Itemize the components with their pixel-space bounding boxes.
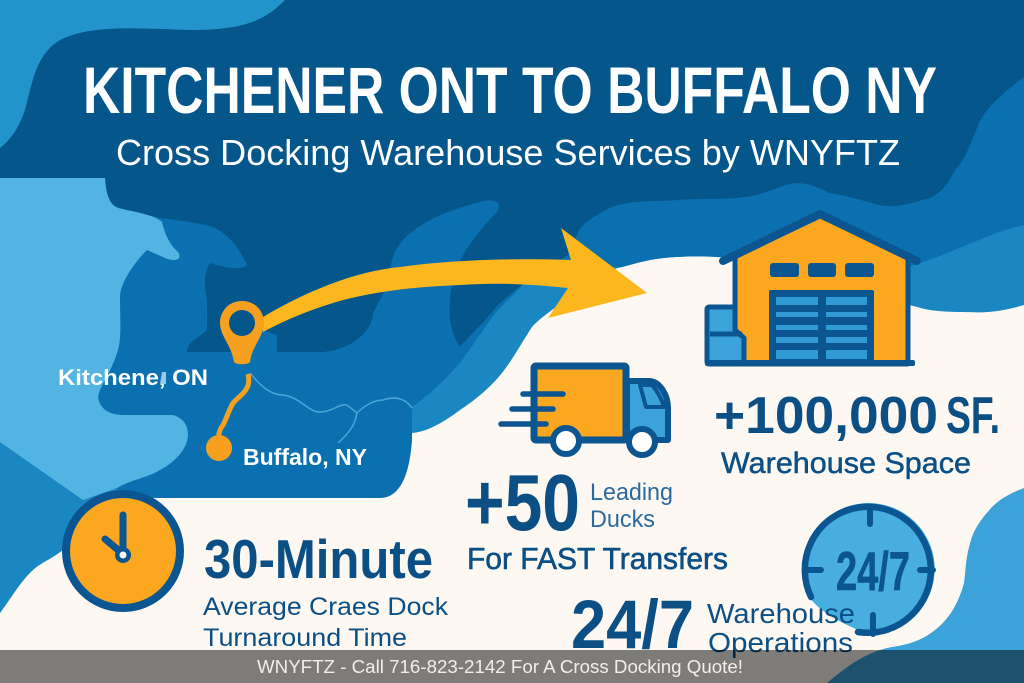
label glitch mark <box>160 372 166 384</box>
icon: warehouse <box>705 214 917 366</box>
box divider <box>710 332 742 336</box>
clock ring <box>805 507 931 633</box>
clock center <box>115 547 131 563</box>
warehouse ground line <box>705 360 915 366</box>
warehouse side boxes <box>707 307 745 364</box>
clock fill <box>803 503 935 635</box>
stat number: 30-Minute <box>204 528 433 590</box>
background: dark blue header shape <box>0 0 1024 352</box>
map route <box>58 365 412 470</box>
footer text: WNYFTZ - Call 716-823-2142 For A Cross Docking Quote! <box>257 657 743 677</box>
background: mid blue map region <box>0 0 1024 498</box>
pin hole <box>229 310 255 336</box>
stat unit: SF. <box>946 387 1000 445</box>
label line two: Turnaround Time <box>203 624 407 652</box>
warehouse body <box>735 216 908 364</box>
label line two: Ducks <box>590 506 655 533</box>
clock text: 24/7 <box>836 540 910 602</box>
label line two: Operations <box>708 627 853 658</box>
rear wheel <box>553 428 579 454</box>
clock face <box>66 494 180 608</box>
stat: turnaround time <box>203 528 449 652</box>
stat number: +50 <box>465 458 580 547</box>
icon: location pin <box>220 301 264 364</box>
clock hands <box>105 515 123 554</box>
warehouse windows <box>770 263 874 277</box>
warehouse roof <box>723 214 917 261</box>
background: top left blue shape <box>0 0 285 148</box>
truck window <box>640 385 664 407</box>
background: bottom right blue blob <box>827 488 1024 683</box>
background: light blue shape <box>0 178 188 500</box>
label line one: Warehouse <box>707 598 855 629</box>
route line <box>219 374 249 445</box>
icon: delivery truck <box>501 366 668 455</box>
footer background <box>0 650 1024 683</box>
stat: warehouse operations <box>571 586 855 663</box>
label: kitchener: Kitchene, ON <box>58 365 208 390</box>
speed lines <box>501 394 563 424</box>
pin body <box>220 301 264 364</box>
stat: warehouse space <box>714 387 1000 480</box>
truck cab <box>627 381 668 440</box>
warehouse door <box>769 290 874 362</box>
buffalo dot <box>206 435 232 461</box>
stat number: 24/7 <box>571 586 694 663</box>
footer bar <box>0 650 1024 683</box>
subtitle: Cross Docking Warehouse Services by WNYFTZ <box>116 132 900 173</box>
label line one: Leading <box>590 479 673 506</box>
truck cargo box <box>534 366 626 440</box>
thin road lines <box>250 373 412 443</box>
front wheel <box>629 429 655 455</box>
icon: 24/7 clock <box>803 503 935 635</box>
icon: orange clock <box>66 494 180 608</box>
label: buffalo: Buffalo, NY <box>243 444 367 470</box>
stat label: Warehouse Space <box>721 447 971 480</box>
clock center dot <box>120 552 126 558</box>
label line three: For FAST Transfers <box>467 541 728 576</box>
clock ticks <box>807 510 933 634</box>
stat: leading docks <box>465 458 728 576</box>
stat number: +100,000 <box>714 387 938 445</box>
arrow: kitchener to warehouse <box>263 228 647 332</box>
label line one: Average Craes Dock <box>203 593 449 621</box>
